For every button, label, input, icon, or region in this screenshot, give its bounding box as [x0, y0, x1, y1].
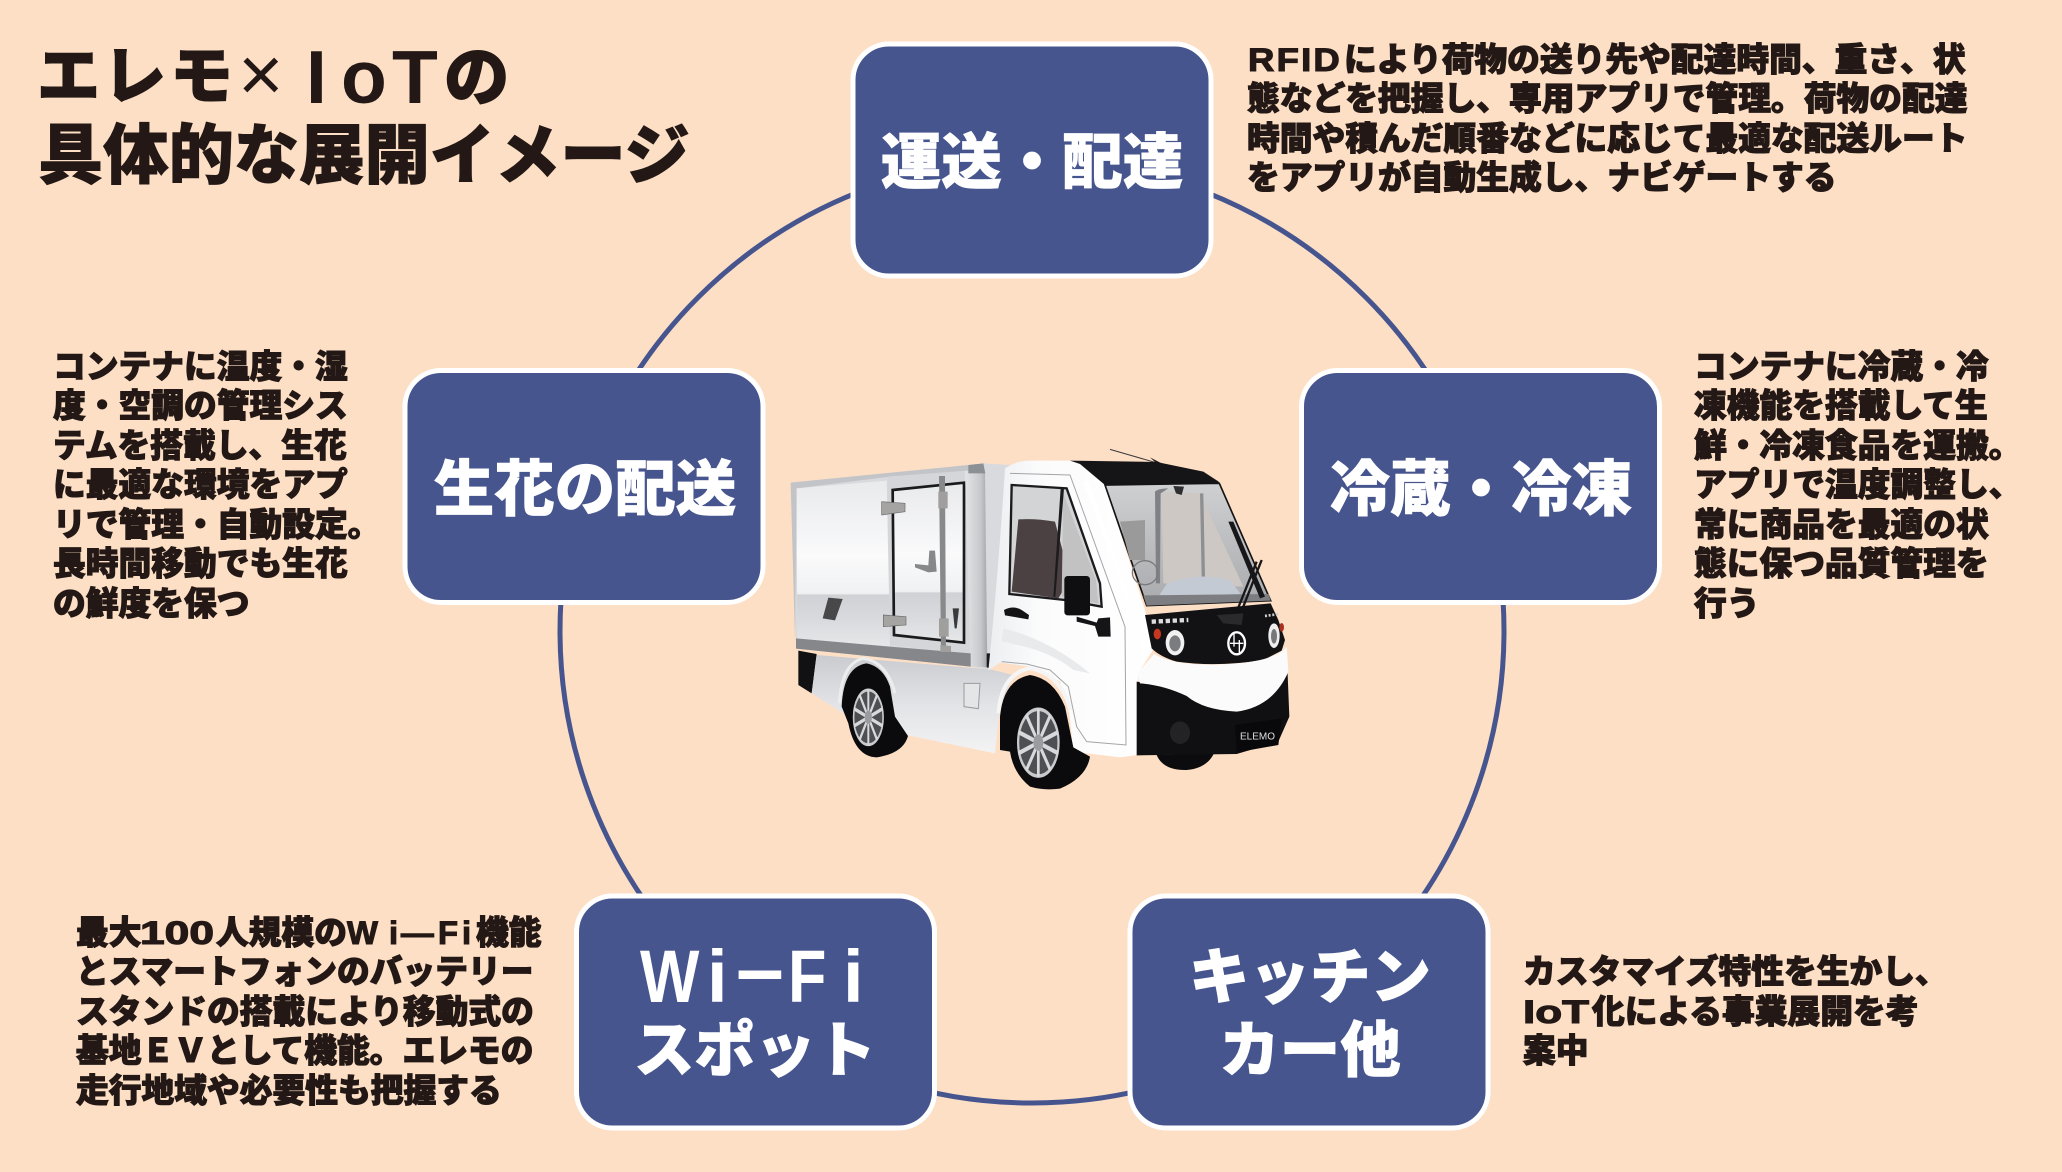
panel: delivery: 運送・配達: [881, 114, 1183, 201]
text: kitchen car description: カスタマイズ特性を生かし、: [1523, 953, 1948, 990]
title: の: [444, 24, 509, 119]
panel: kitchen car: キッチン: [1189, 929, 1431, 1016]
text: cold storage description: コンテナに冷蔵・冷: [1694, 348, 1989, 385]
text: delivery description: [1247, 41, 1968, 196]
text: delivery description: により荷物の送り先や配達時間、重さ、状: [1344, 41, 1966, 78]
text: cold storage description: 行う: [1694, 585, 1760, 622]
text: kitchen car description: IoT: [1523, 993, 1589, 1030]
panel: cold storage: 冷蔵・冷凍: [1330, 441, 1632, 528]
panel: kitchen car: [1130, 896, 1488, 1128]
text: cold storage description: [1694, 348, 2022, 622]
text: kitchen car description: 案中: [1523, 1032, 1588, 1069]
truck cab section: ELEMO: [1240, 732, 1275, 743]
title: [37, 24, 690, 197]
panel: Wi-Fi spot: W: [640, 935, 700, 1018]
text: Wi-Fi description: [76, 914, 542, 1109]
text: Wi-Fi description: スタンドの搭載により移動式の: [76, 993, 534, 1030]
text: delivery description: RFID: [1248, 41, 1342, 78]
title: IoT: [306, 35, 438, 119]
text: cold storage description: 態に保つ品質管理を: [1694, 545, 1989, 582]
text: Wi-Fi description: Wi―Fi: [347, 914, 471, 951]
panel: Wi-Fi spot: i: [707, 935, 728, 1018]
text: flower delivery description: に最適な環境をアプ: [53, 466, 348, 503]
text: Wi-Fi description: 人規模の: [216, 914, 347, 951]
text: delivery description: 態などを把握し、専用アプリで管理。荷物の配達: [1247, 80, 1968, 117]
title: 具体的な展開イメージ: [38, 102, 690, 197]
text: flower delivery description: リで管理・自動設定。: [53, 506, 380, 543]
text: Wi-Fi description: 最大: [76, 914, 142, 951]
panel: Wi-Fi spot: i: [843, 935, 864, 1018]
connecting circle: [560, 159, 1504, 1103]
text: cold storage description: アプリで温度調整し、: [1694, 466, 2022, 503]
text: cold storage description: 鮮・冷凍食品を運搬。: [1694, 427, 2022, 464]
text: cold storage description: 常に商品を最適の状: [1694, 506, 1989, 543]
panel: kitchen car: カー他: [1219, 1002, 1401, 1089]
truck rear section: [791, 463, 1013, 757]
text: Wi-Fi description: 走行地域や必要性も把握する: [76, 1072, 502, 1109]
title: エレモ: [37, 26, 233, 117]
text: delivery description: をアプリが自動生成し、ナビゲートする: [1247, 159, 1836, 196]
text: cold storage description: 凍機能を搭載して生: [1694, 387, 1988, 424]
panel: Wi-Fi spot: スポット: [634, 1002, 876, 1089]
text: flower delivery description: テムを搭載し、生花: [53, 427, 347, 464]
truck illustration: [791, 449, 1289, 789]
panel: Wi-Fi spot: F: [788, 935, 826, 1018]
text: flower delivery description: の鮮度を保つ: [53, 585, 250, 622]
panel: flower delivery: 生花の配送: [434, 441, 736, 528]
truck cab section: [988, 449, 1289, 789]
text: Wi-Fi description: 機能: [476, 914, 542, 951]
panel: flower delivery: [405, 370, 763, 602]
panel: cold storage: [1302, 370, 1660, 602]
text: flower delivery description: 度・空調の管理シス: [53, 387, 348, 424]
text: flower delivery description: 長時間移動でも生花: [53, 545, 348, 582]
panel: delivery: [853, 44, 1211, 276]
panel: Wi-Fi spot: [576, 896, 934, 1128]
text: kitchen car description: [1523, 953, 1948, 1069]
text: kitchen car description: 化による事業展開を考: [1592, 993, 1919, 1030]
text: Wi-Fi description: 基地ＥＶとして機能。エレモの: [76, 1032, 534, 1069]
panel: Wi-Fi spot: –: [736, 921, 784, 1017]
text: Wi-Fi description: とスマートフォンのバッテリー: [76, 953, 534, 990]
text: flower delivery description: [53, 348, 380, 622]
text: flower delivery description: コンテナに温度・湿: [53, 348, 348, 385]
text: delivery description: 時間や積んだ順番などに応じて最適な配送ルート: [1247, 120, 1968, 157]
text: Wi-Fi description: 100: [140, 914, 214, 951]
title: ×: [238, 30, 284, 118]
